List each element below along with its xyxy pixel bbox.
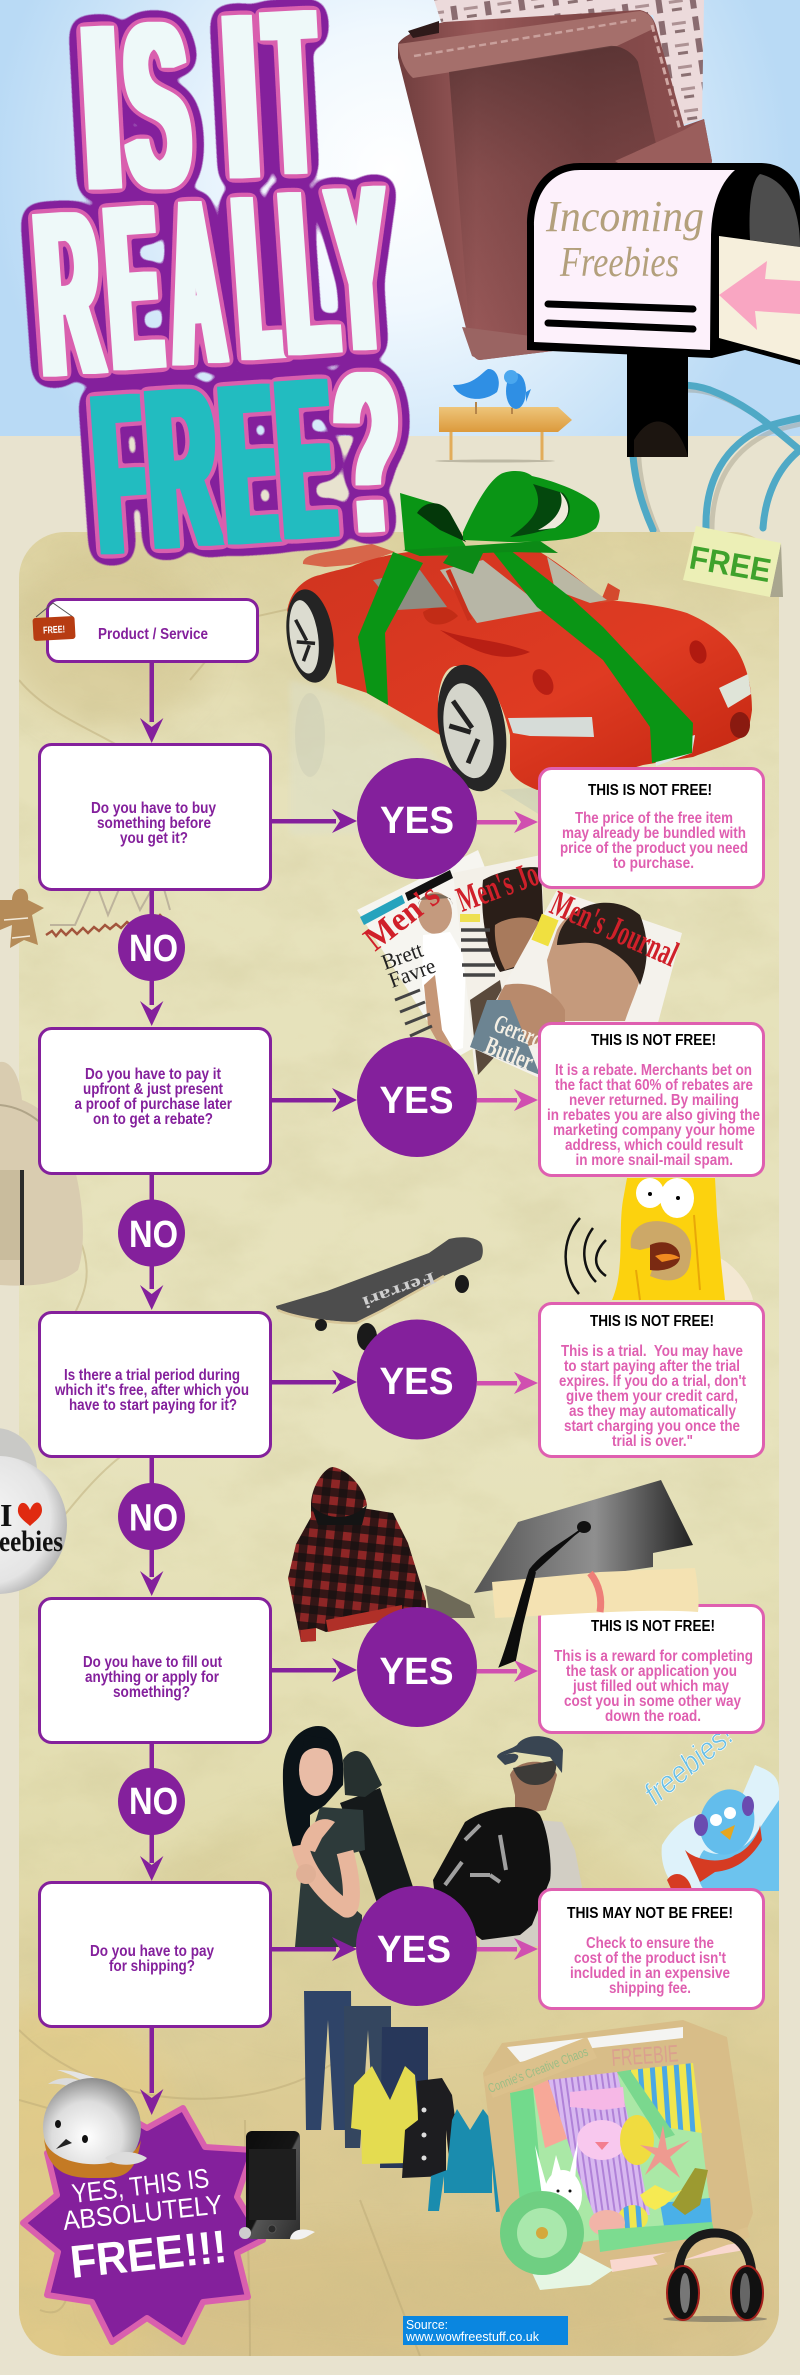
icon: scrapbook freebie frame bbox=[483, 2020, 753, 2290]
icon: backpack bbox=[0, 1062, 83, 1286]
icon: plaid hoodie bbox=[288, 1467, 475, 1642]
car windows bbox=[373, 557, 607, 623]
title line: IS IT bbox=[74, 0, 322, 239]
title line: FREE? bbox=[87, 325, 409, 603]
title line: FREE?: F bbox=[87, 347, 154, 603]
no circle 4 bbox=[118, 1768, 185, 1835]
sky background bbox=[0, 0, 800, 436]
magazine: left cover: Brett bbox=[378, 937, 426, 975]
arrow: q1 to yes bbox=[271, 809, 357, 833]
arrow: q2 no bbox=[140, 1174, 163, 1310]
ribbon bow bbox=[400, 471, 600, 574]
arrow: q3 no bbox=[140, 1457, 163, 1596]
icon: car with ribbon bbox=[281, 471, 760, 835]
arrow: q3 to yes bbox=[271, 1370, 357, 1394]
title line: REALLY: L bbox=[228, 145, 291, 409]
question box 5: for shipping? bbox=[109, 1958, 195, 1975]
yes circle 3: YES bbox=[380, 1361, 454, 1403]
result box 3: start charging you once the bbox=[564, 1418, 740, 1435]
result box 2: It is a rebate. Merchants bet on bbox=[555, 1062, 752, 1079]
title: is it really free: R bbox=[140, 339, 225, 597]
final starburst: absolutely free: YES, THIS IS bbox=[70, 2163, 211, 2209]
question box 5 bbox=[40, 1882, 270, 2026]
icon: birds on wooden sign bbox=[435, 369, 572, 462]
question box 1: something before bbox=[97, 815, 211, 832]
icon: cardigans bbox=[351, 2066, 508, 2212]
mailbox label: Freebies: Freebies bbox=[559, 240, 679, 286]
rear wheel bbox=[281, 586, 339, 686]
result box 3: to start paying after the trial bbox=[564, 1358, 740, 1375]
question box 2: on to get a rebate? bbox=[93, 1111, 213, 1128]
arrow: q5 to yes bbox=[271, 1937, 357, 1961]
result box 4: the task or application you bbox=[566, 1663, 737, 1680]
result box 3: trial is over." bbox=[612, 1433, 693, 1450]
title: is it really free: L bbox=[228, 145, 291, 409]
no circle 2 bbox=[118, 1200, 185, 1266]
result box 2: the fact that 60% of rebates are bbox=[555, 1077, 753, 1094]
source label: www.wowfreestuff.co.uk bbox=[405, 2329, 539, 2344]
title line: REALLY bbox=[29, 137, 396, 427]
source label bbox=[403, 2316, 568, 2345]
result box 5: included in an expensive bbox=[570, 1965, 730, 1982]
title: is it really free: R bbox=[29, 162, 108, 427]
title: is it really free: A bbox=[162, 150, 229, 415]
result box 1: The price of the free item bbox=[575, 810, 733, 827]
question box 4: something? bbox=[113, 1684, 190, 1701]
result box 3: expires. If you do a trial, don't bbox=[559, 1373, 747, 1390]
title line: FREE?: ? bbox=[328, 325, 409, 582]
magazine: left cover: Men's bbox=[357, 877, 447, 958]
result box 1: THIS IS NOT FREE! bbox=[588, 782, 712, 799]
question box 4 bbox=[40, 1598, 270, 1742]
freebies handwritten label: freebies! bbox=[637, 1717, 740, 1811]
question box 2: a proof of purchase later bbox=[74, 1096, 232, 1113]
title line: REALLY: R bbox=[29, 162, 108, 427]
question box 1: Do you have to buy bbox=[91, 800, 216, 817]
yes circle 5: YES bbox=[377, 1929, 451, 1971]
yes circle 4: YES bbox=[380, 1651, 454, 1693]
question box 5: Do you have to pay bbox=[90, 1943, 214, 1960]
result box 3: give them your credit card, bbox=[566, 1388, 738, 1405]
ribbon bands bbox=[358, 548, 693, 763]
icon: guy with shiny backpack bbox=[433, 1736, 582, 1950]
icon: I love freebies button: I bbox=[0, 1497, 12, 1533]
arrow: yes to result 4 bbox=[477, 1660, 538, 1682]
title: is it really free: F bbox=[87, 347, 154, 603]
result box 4: cost you in some other way bbox=[564, 1693, 741, 1710]
result box 5: cost of the product isn't bbox=[574, 1950, 727, 1967]
result box 2: marketing company your home bbox=[553, 1122, 755, 1139]
question box 3 bbox=[40, 1312, 270, 1456]
arrow: yes to result 2 bbox=[477, 1089, 538, 1111]
result box 2 bbox=[540, 1024, 764, 1176]
title: is it really free: E bbox=[100, 155, 167, 420]
result box 5: THIS MAY NOT BE FREE! bbox=[567, 1905, 733, 1922]
girl: hair bbox=[283, 1726, 343, 1863]
result box 3: This is a trial. You may have bbox=[561, 1343, 743, 1360]
yes circle 1: YES bbox=[380, 800, 454, 842]
no circle 1 bbox=[118, 914, 185, 981]
icon: wallet with cash bbox=[398, 0, 712, 360]
no circle 2: NO bbox=[129, 1214, 178, 1256]
result box 1 bbox=[540, 768, 764, 888]
result box 2: in rebates you are also giving the bbox=[547, 1107, 760, 1124]
magazine: left cover bbox=[357, 850, 542, 1060]
title line: REALLY: L bbox=[274, 141, 343, 405]
magazine: right cover: Gerard bbox=[490, 1009, 547, 1054]
result box 5: shipping fee. bbox=[609, 1980, 691, 1997]
icon: free hanging tag bbox=[32, 603, 76, 641]
icon: jeans bbox=[304, 1991, 428, 2168]
result box 3 bbox=[540, 1304, 764, 1456]
icon: homer shocked bbox=[612, 1178, 753, 1300]
icon: magazines bbox=[357, 850, 684, 1090]
icon: scrapbook freebie frame: Connie's Creative Chaos bbox=[486, 2044, 590, 2096]
flow: start box: Product / Service bbox=[98, 626, 208, 643]
title: is it really free: L bbox=[274, 141, 343, 405]
source label: Source: bbox=[406, 2317, 448, 2332]
final starburst: absolutely free bbox=[23, 2107, 263, 2342]
title line: REALLY: Y bbox=[323, 137, 396, 402]
result box 5 bbox=[540, 1890, 764, 2008]
icon: twitter bird with freebies text bbox=[637, 1717, 779, 1891]
arrow: yes to result 3 bbox=[477, 1372, 538, 1394]
icon: white bird mascot bbox=[43, 2070, 147, 2178]
girl: shirt bbox=[295, 1807, 365, 1947]
yes circle 4 bbox=[357, 1607, 477, 1727]
title: is it really free: E bbox=[214, 336, 287, 593]
yes circle 2 bbox=[357, 1037, 477, 1157]
question box 1: you get it? bbox=[120, 830, 188, 847]
result box 4: THIS IS NOT FREE! bbox=[591, 1618, 715, 1635]
arrow: q5 to final bbox=[140, 2027, 163, 2115]
frame title: FREEBIE bbox=[611, 2040, 679, 2072]
icon: sound waves bbox=[566, 1218, 606, 1294]
question box 4: anything or apply for bbox=[85, 1669, 219, 1686]
car headlights bbox=[508, 674, 751, 738]
magazine: center cover bbox=[451, 853, 548, 1075]
result box 2: address, which could result bbox=[565, 1137, 744, 1154]
yes circle 2: YES bbox=[380, 1080, 454, 1122]
final starburst: absolutely free: ABSOLUTELY bbox=[61, 2189, 224, 2236]
question box 2: Do you have to pay it bbox=[85, 1066, 222, 1083]
icon: skateboard bbox=[276, 1237, 483, 1351]
arrow: yes to result 1 bbox=[477, 811, 538, 833]
question box 3: which it's free, after which you bbox=[54, 1382, 249, 1399]
result box 2: never returned. By mailing bbox=[569, 1092, 739, 1109]
icon: graduation cap and diploma bbox=[474, 1480, 699, 1666]
question box 4: Do you have to fill out bbox=[83, 1654, 223, 1671]
magazine: left cover: Favre bbox=[385, 953, 439, 993]
question box 2 bbox=[40, 1028, 270, 1174]
title: is it really free: E bbox=[271, 331, 340, 587]
magazine: center cover: Men's Jo bbox=[451, 853, 544, 920]
arrow: start to q1 bbox=[140, 662, 163, 743]
arrow: q2 to yes bbox=[271, 1088, 357, 1112]
question box 3: have to start paying for it? bbox=[69, 1397, 237, 1414]
title line: FREE?: E bbox=[214, 336, 287, 593]
result box 4: down the road. bbox=[605, 1708, 701, 1725]
arrow: q4 to yes bbox=[271, 1658, 357, 1682]
icon: iPhone bbox=[239, 2131, 315, 2240]
icon: free tent card bbox=[683, 526, 783, 597]
title: is it really free: Y bbox=[323, 137, 396, 402]
icon: girl with backpack bbox=[283, 1726, 413, 1947]
result box 3: THIS IS NOT FREE! bbox=[590, 1313, 714, 1330]
arrow: yes to result 5 bbox=[477, 1938, 538, 1960]
title line: REALLY: A bbox=[162, 150, 229, 415]
result box 4: just filled out which may bbox=[572, 1678, 729, 1695]
icon: rope bbox=[633, 337, 800, 535]
title: is it really free bbox=[29, 0, 409, 603]
result box 1: to purchase. bbox=[613, 855, 694, 872]
yes circle 3 bbox=[357, 1320, 477, 1440]
title line: REALLY: E bbox=[100, 155, 167, 420]
result box 2: THIS IS NOT FREE! bbox=[591, 1032, 716, 1049]
magazine: right cover bbox=[470, 883, 684, 1090]
final starburst: absolutely free: FREE!!! bbox=[68, 2220, 229, 2288]
icon: I love freebies button bbox=[0, 1428, 67, 1594]
result box 1: may already be bundled with bbox=[562, 825, 746, 842]
title line: FREE?: R bbox=[140, 339, 225, 597]
icon: mailbox bbox=[527, 163, 800, 457]
result box 4: This is a reward for completing bbox=[554, 1648, 753, 1665]
title: is it really free: ? bbox=[328, 325, 409, 582]
result box 4 bbox=[540, 1606, 764, 1732]
result box 3: as they may automatically bbox=[569, 1403, 736, 1420]
front wheel bbox=[428, 659, 516, 797]
arrow: q4 no bbox=[140, 1743, 163, 1881]
flow: start box bbox=[48, 600, 258, 662]
icon: gingerbread and zigzags bbox=[0, 875, 170, 948]
icon: headphones bbox=[663, 2233, 767, 2322]
no circle 1: NO bbox=[129, 928, 178, 970]
result box 5: Check to ensure the bbox=[586, 1935, 714, 1952]
question box 2: upfront & just present bbox=[83, 1081, 224, 1098]
panel: parchment background bbox=[0, 532, 779, 2375]
arrow: q1 no bbox=[140, 890, 163, 1026]
result box 2: in more snail-mail spam. bbox=[576, 1152, 733, 1169]
yes circle 5 bbox=[356, 1886, 477, 2006]
title line: FREE?: E bbox=[271, 331, 340, 587]
question box 3: Is there a trial period during bbox=[64, 1367, 240, 1384]
no circle 3 bbox=[118, 1483, 185, 1550]
skateboard logo: Ferrari bbox=[360, 1268, 438, 1312]
no circle 4: NO bbox=[129, 1781, 178, 1823]
yes circle 1 bbox=[357, 758, 477, 879]
result box 1: price of the product you need bbox=[560, 840, 748, 857]
magazine: right cover: Men's Journal bbox=[545, 883, 684, 974]
girl: cape and helmet bbox=[340, 1751, 413, 1903]
no circle 3: NO bbox=[129, 1498, 178, 1540]
question box 1 bbox=[40, 744, 270, 890]
free tent card label: FREE bbox=[687, 538, 774, 589]
girl: arm and hand bbox=[300, 1845, 351, 1909]
icon: free hanging tag: FREE! bbox=[43, 624, 65, 637]
magazine: right cover: Butler bbox=[481, 1031, 538, 1076]
mailbox label: Incoming: Incoming bbox=[545, 192, 704, 241]
